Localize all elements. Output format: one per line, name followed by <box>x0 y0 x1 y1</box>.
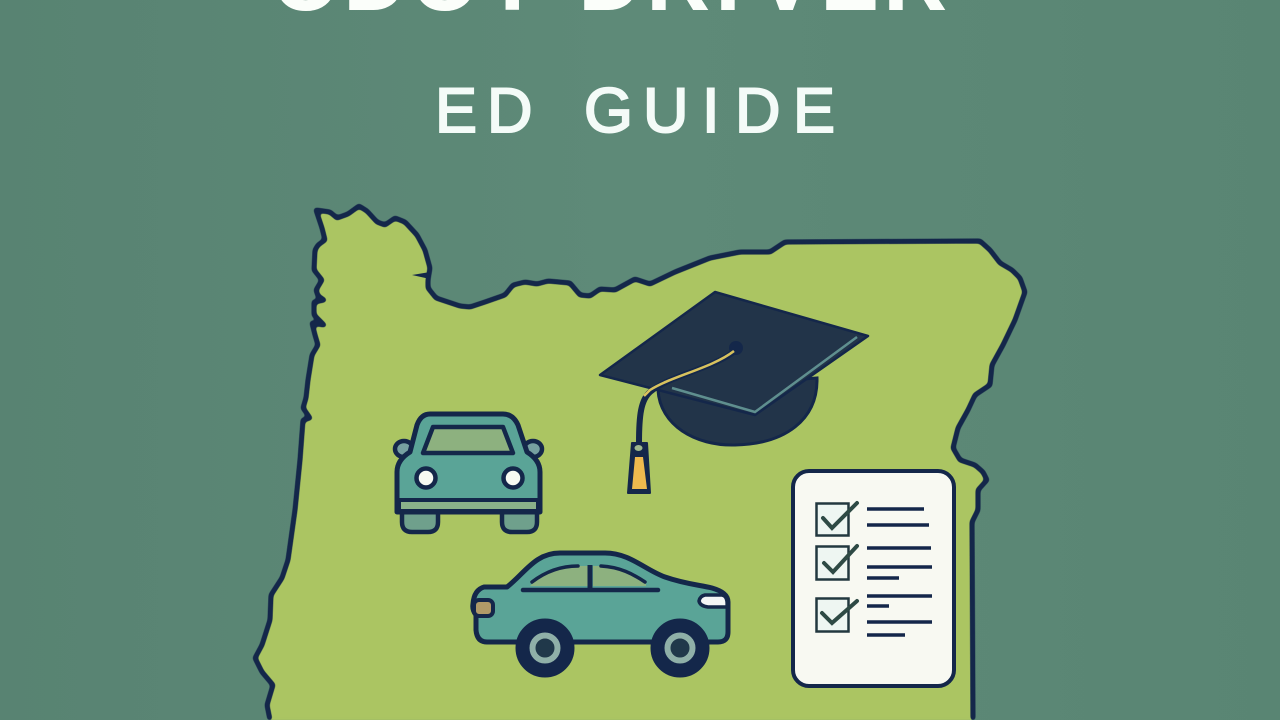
headlight <box>699 595 727 607</box>
icon: graduation cap <box>600 292 868 493</box>
cap board edge highlight <box>672 337 857 412</box>
clipboard sheet <box>793 471 954 686</box>
cap button <box>729 341 743 355</box>
headlights <box>416 468 436 488</box>
front wheel <box>651 619 709 677</box>
checklist clipboard <box>793 471 954 686</box>
pillar <box>588 565 592 588</box>
tassel <box>628 443 650 493</box>
rear wheel <box>516 619 574 677</box>
body <box>473 553 728 642</box>
cap base <box>658 378 817 445</box>
checklist text lines <box>867 509 932 635</box>
icon: car side view <box>473 553 728 677</box>
check marks <box>822 503 857 623</box>
windshield <box>423 427 513 453</box>
mirrors <box>395 441 413 457</box>
checkboxes <box>816 504 848 632</box>
windows <box>530 566 588 586</box>
body <box>397 414 540 512</box>
map: Oregon state outline <box>255 206 1025 720</box>
window sill <box>523 588 658 592</box>
wheels <box>402 512 438 532</box>
tassel cord <box>639 350 736 443</box>
cap board <box>600 292 868 415</box>
subtitle: ED GUIDE: ED GUIDE <box>0 76 835 146</box>
icon: car front view <box>395 414 542 532</box>
taillight <box>474 600 493 616</box>
bumper <box>399 500 538 511</box>
